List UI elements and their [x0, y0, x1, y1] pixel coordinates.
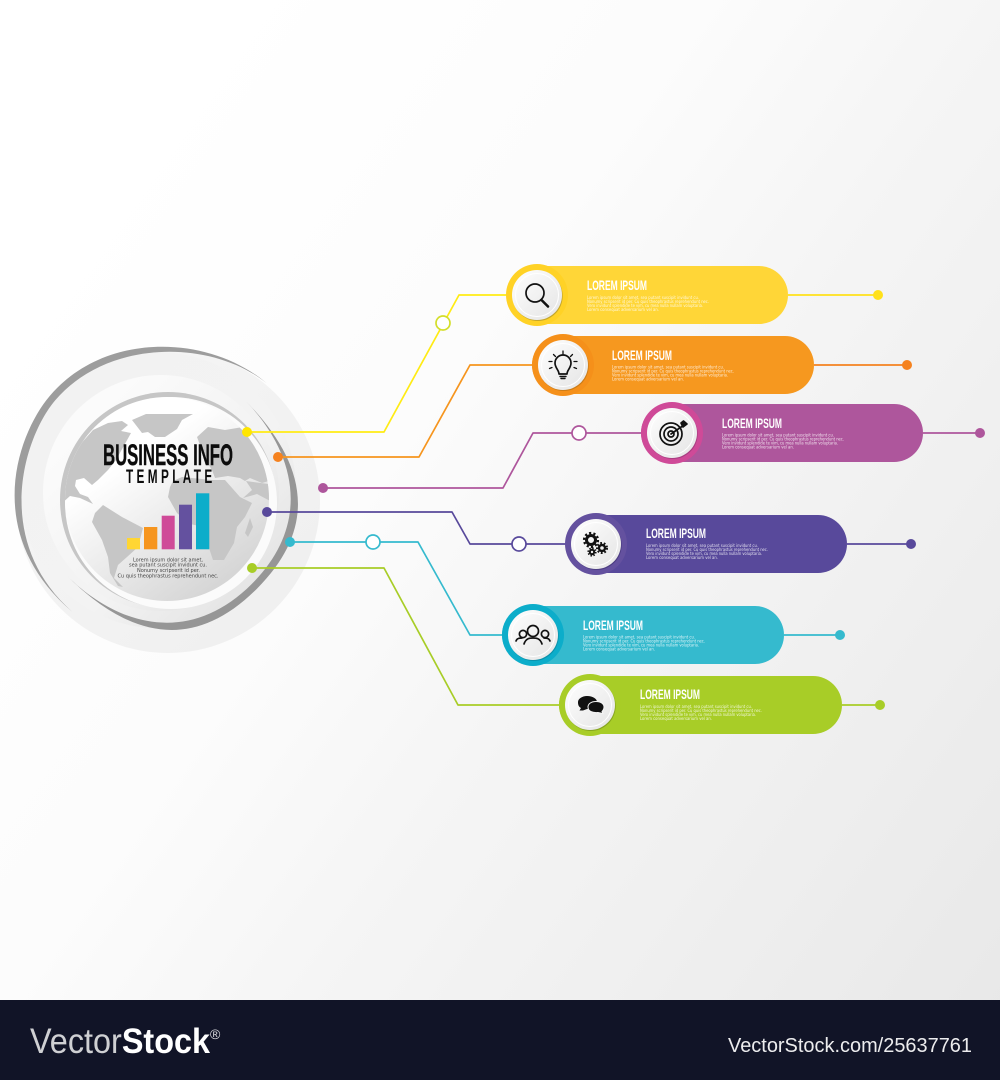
- footer bar: [0, 1000, 1000, 1080]
- body text: Lorem consequat adversarium vel an.: [587, 307, 659, 312]
- body text: Lorem consequat adversarium vel an.: [583, 646, 655, 652]
- hub caption: Cu quis theophrastus reprehendunt nec.: [118, 574, 219, 580]
- panel: green chat: [559, 674, 842, 736]
- connector: magenta: [318, 426, 985, 493]
- icon: gears: [584, 533, 607, 556]
- body text: Nonumy scripserit id per. Cu quis theophrastus reprehendunt nec.: [640, 708, 762, 713]
- body text: [587, 295, 709, 312]
- connector: orange: [273, 360, 912, 462]
- body text: Lorem ipsum dolor sit amet, sea putant suscipit invidunt cu.: [583, 634, 695, 640]
- footer logo: VectorStock: [30, 1022, 210, 1061]
- globe disc: [65, 397, 269, 601]
- body text: [640, 704, 762, 721]
- body text: Vero invidunt splendide te vim, cu mea nulla nullam voluptaria.: [587, 303, 703, 308]
- halo disc: [16, 349, 320, 653]
- connector: indigo: [262, 507, 916, 551]
- panel: orange idea: [532, 334, 814, 396]
- panel: yellow search: [506, 264, 788, 326]
- footer url: VectorStock.com/25637761: [728, 1035, 972, 1057]
- inner grey ring: [60, 392, 276, 608]
- icon: light bulb: [549, 351, 577, 378]
- heading: LOREM IPSUM: [587, 277, 647, 293]
- connector: cyan: [285, 535, 845, 640]
- outer crescent lower-right: [67, 399, 345, 677]
- hub caption: sea putant suscipit invidunt cu.: [129, 563, 207, 569]
- body text: Vero invidunt splendide te vim, cu mea nulla nullam voluptaria.: [646, 551, 762, 556]
- icon: chat bubbles: [578, 696, 604, 714]
- heading: LOREM IPSUM: [646, 525, 706, 541]
- body text: Lorem consequat adversarium vel an.: [640, 716, 712, 721]
- body text: Lorem ipsum dolor sit amet, sea putant suscipit invidunt cu.: [722, 432, 834, 438]
- white band: [43, 375, 279, 611]
- body text: [612, 364, 734, 382]
- bar chart: [127, 493, 209, 549]
- body text: Lorem ipsum dolor sit amet, sea putant suscipit invidunt cu.: [587, 295, 699, 300]
- registered mark: ®: [210, 1026, 221, 1042]
- panel: magenta target: [641, 402, 923, 464]
- heading: LOREM IPSUM: [612, 347, 672, 363]
- connector: yellow: [242, 290, 883, 437]
- heading: LOREM IPSUM: [583, 617, 643, 633]
- hub: globe emblem: [14, 346, 320, 653]
- connector: green: [247, 563, 885, 710]
- hub title: BUSINESS INFO: [103, 439, 233, 472]
- outer crescent upper-left: [0, 282, 267, 612]
- body text: Nonumy scripserit id per. Cu quis theophrastus reprehendunt nec.: [646, 547, 768, 552]
- body text: Nonumy scripserit id per. Cu quis theophrastus reprehendunt nec.: [587, 299, 709, 304]
- body text: Lorem consequat adversarium vel an.: [612, 376, 684, 382]
- panel: indigo gears: [565, 513, 847, 575]
- heading: LOREM IPSUM: [722, 415, 782, 431]
- icon: magnifier: [526, 284, 548, 306]
- middle band: [20, 352, 296, 628]
- body text: Lorem ipsum dolor sit amet, sea putant suscipit invidunt cu.: [612, 364, 724, 370]
- body text: Vero invidunt splendide te vim, cu mea nulla nullam voluptaria.: [612, 372, 728, 378]
- inner white band: [65, 397, 277, 609]
- panel: cyan people: [502, 604, 784, 666]
- world map: [60, 414, 272, 587]
- body text: [722, 432, 844, 450]
- icon: people: [516, 626, 550, 644]
- hub caption: Nonumy scripserit id per.: [137, 568, 200, 574]
- hub caption: [118, 557, 219, 580]
- body text: Nonumy scripserit id per. Cu quis theophrastus reprehendunt nec.: [722, 436, 844, 442]
- body text: Lorem ipsum dolor sit amet, sea putant suscipit invidunt cu.: [646, 543, 758, 548]
- body text: Nonumy scripserit id per. Cu quis theophrastus reprehendunt nec.: [583, 638, 705, 644]
- hub caption: Lorem ipsum dolor sit amet,: [133, 557, 203, 563]
- body text: Lorem consequat adversarium vel an.: [646, 555, 718, 560]
- body text: Nonumy scripserit id per. Cu quis theophrastus reprehendunt nec.: [612, 368, 734, 374]
- icon: target: [660, 421, 687, 445]
- body text: Lorem ipsum dolor sit amet, sea putant suscipit invidunt cu.: [640, 704, 752, 709]
- body text: Vero invidunt splendide te vim, cu mea nulla nullam voluptaria.: [640, 712, 756, 717]
- body text: Vero invidunt splendide te vim, cu mea nulla nullam voluptaria.: [583, 642, 699, 648]
- body text: Lorem consequat adversarium vel an.: [722, 444, 794, 450]
- body text: [646, 543, 768, 560]
- heading: LOREM IPSUM: [640, 686, 700, 702]
- body text: [583, 634, 705, 652]
- body text: Vero invidunt splendide te vim, cu mea nulla nullam voluptaria.: [722, 440, 838, 446]
- hub subtitle: TEMPLATE: [126, 467, 212, 488]
